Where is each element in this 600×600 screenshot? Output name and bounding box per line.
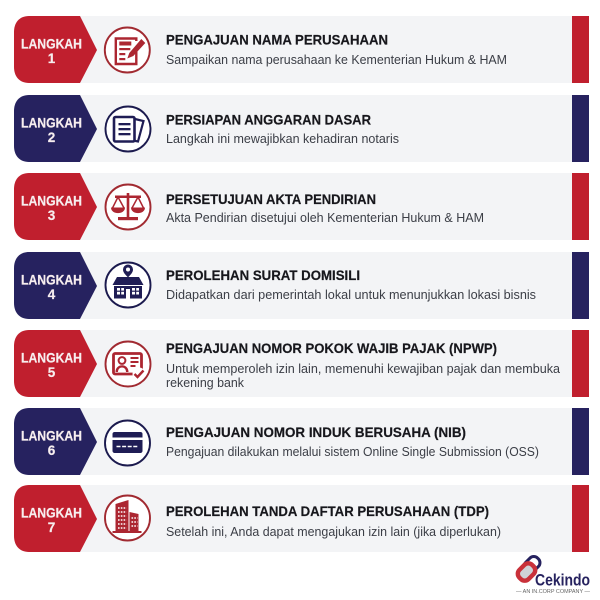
step 2 end bar	[572, 95, 589, 162]
step 4 badge: 4	[48, 287, 56, 302]
step 4 heading: PEROLEHAN SURAT DOMISILI	[166, 267, 360, 283]
step 1 heading: PENGAJUAN NAMA PERUSAHAAN	[166, 32, 388, 48]
step 3 end bar	[572, 173, 589, 240]
step 3 badge: 3	[48, 208, 56, 223]
step 6 badge	[14, 408, 97, 475]
step 7 end bar	[572, 485, 589, 552]
step 3 badge	[14, 173, 97, 240]
step 4 end bar	[572, 252, 589, 319]
icon: credit card	[105, 420, 150, 466]
icon: ID card with check	[106, 342, 150, 386]
step 5 description	[166, 361, 561, 390]
step 3 description: Akta Pendirian disetujui oleh Kementerian Hukum & HAM	[166, 210, 484, 225]
step 5 badge: LANGKAH	[21, 350, 82, 366]
step 2 description: Langkah ini mewajibkan kehadiran notaris	[166, 131, 399, 146]
step 2 badge: LANGKAH	[21, 116, 82, 130]
step 7 badge: 7	[48, 520, 55, 535]
icon: building with location pin	[106, 262, 150, 308]
logo icon: chain links	[516, 554, 542, 583]
step 5 heading: PENGAJUAN NOMOR POKOK WAJIB PAJAK (NPWP)	[166, 340, 497, 356]
step 1 description: Sampaikan nama perusahaan ke Kementerian Hukum & HAM	[166, 52, 507, 67]
icon: document and pencil	[105, 28, 150, 72]
step 1 badge: LANGKAH	[21, 36, 82, 52]
step 4 panel	[14, 252, 589, 319]
step 5 description: Untuk memperoleh izin lain, memenuhi kewajiban pajak dan membuka	[166, 361, 561, 376]
step 6 heading: PENGAJUAN NOMOR INDUK BERUSAHA (NIB)	[166, 424, 466, 440]
icon: stacked documents	[106, 106, 150, 152]
step 6 badge: 6	[48, 443, 56, 458]
step 2 badge: 2	[48, 130, 55, 145]
step 2 panel	[14, 95, 589, 162]
icon: scales of justice	[106, 184, 150, 230]
step 6 panel	[14, 408, 589, 475]
step 4 description: Didapatkan dari pemerintah lokal untuk menunjukkan lokasi bisnis	[166, 287, 536, 302]
logo tagline: — AN IN.CORP COMPANY —	[516, 589, 590, 595]
step 6 description: Pengajuan dilakukan melalui sistem Online Single Submission (OSS)	[166, 444, 539, 459]
step 2 badge	[14, 95, 97, 162]
step 7 heading: PEROLEHAN TANDA DAFTAR PERUSAHAAN (TDP)	[166, 503, 489, 519]
icon: office buildings	[105, 496, 150, 540]
step 1 badge: 1	[48, 51, 56, 66]
step 7 description: Setelah ini, Anda dapat mengajukan izin lain (jika diperlukan)	[166, 524, 501, 539]
step 7 badge: LANGKAH	[21, 506, 82, 520]
step 3 panel	[14, 173, 589, 240]
step 5 description: rekening bank	[166, 375, 244, 390]
step 1 panel	[14, 16, 589, 83]
step 1 end bar	[572, 16, 589, 83]
step 5 end bar	[572, 330, 589, 397]
step 7 panel	[14, 485, 589, 552]
step 3 badge: LANGKAH	[21, 194, 82, 208]
step 5 badge	[14, 330, 97, 397]
step 1 badge	[14, 16, 97, 83]
step 5 badge: 5	[48, 365, 56, 380]
step 7 badge	[14, 485, 97, 552]
step 6 badge: LANGKAH	[21, 428, 82, 444]
logo: Cekindo	[516, 554, 590, 595]
step 4 badge	[14, 252, 97, 319]
step 3 heading: PERSETUJUAN AKTA PENDIRIAN	[166, 191, 376, 207]
step 2 heading: PERSIAPAN ANGGARAN DASAR	[166, 112, 371, 128]
step 6 end bar	[572, 408, 589, 475]
step 4 badge: LANGKAH	[21, 272, 82, 288]
step 5 panel	[14, 330, 589, 397]
